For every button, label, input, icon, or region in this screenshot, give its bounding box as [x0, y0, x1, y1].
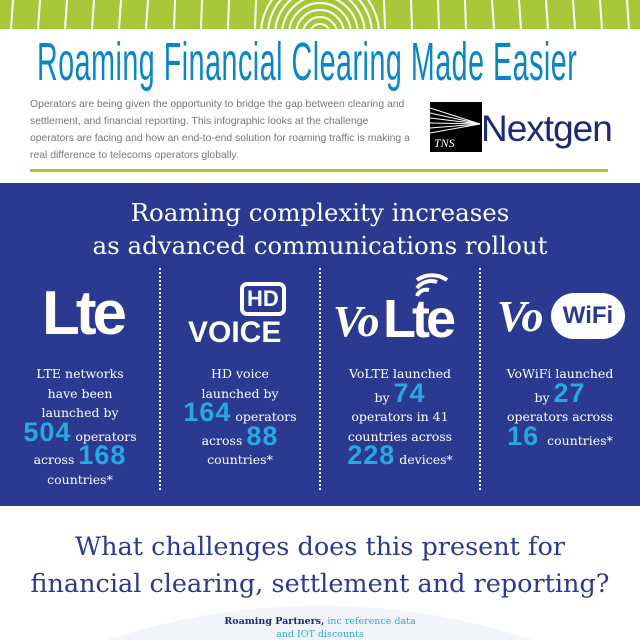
- stat: HD voice: launched by: [201, 386, 279, 400]
- light circle: [0, 600, 640, 640]
- logo: TNS Nextgen: Nextgen: [481, 108, 612, 149]
- stat: VoLTE: 228 devices*: [347, 440, 453, 470]
- icon: VoWiFi: [497, 292, 625, 341]
- stat: VoWiFi: VoWiFi launched: [507, 366, 613, 381]
- stat: LTE: across 168: [34, 440, 126, 470]
- title: Roaming Financial Clearing Made Easier: [37, 32, 577, 92]
- divider green: [30, 169, 608, 172]
- icon: VoLTE: Vo: [333, 297, 379, 346]
- stat: LTE: LTE networks: [36, 366, 124, 381]
- text: roaming partners: [224, 616, 416, 640]
- panel heading: as advanced communications rollout: [93, 231, 547, 260]
- icon: HD voice: HD: [247, 286, 279, 311]
- stat: LTE: have been: [48, 386, 112, 400]
- stat: HD voice: countries*: [207, 452, 273, 467]
- icon: VoWiFi: Vo: [497, 292, 543, 341]
- stat: VoLTE: operators in 41: [351, 409, 449, 424]
- text: roaming partners: Roaming Partners, inc reference data: [224, 616, 416, 627]
- intro text: Operators are being given the opportunity to bridge the gap between clearing and settlement, and financial reporting. This infographic looks at the challenge operators are facing and how an end-to-end solution for roaming traffic is making a real difference to telecoms operators globally.: [30, 99, 410, 161]
- stat: HD voice: across 88: [202, 420, 278, 450]
- stat: VoLTE: countries across: [348, 428, 452, 444]
- panel heading: [93, 198, 548, 260]
- icon: HD voice: [188, 282, 286, 349]
- stat: VoLTE: [347, 366, 453, 470]
- icon: HD voice: VOICE: [188, 316, 281, 349]
- stat: LTE: 504 operators: [23, 416, 137, 446]
- logo: TNS Nextgen: [430, 102, 612, 152]
- stat: VoLTE: VoLTE launched: [349, 366, 451, 381]
- stat: LTE: launched by: [41, 405, 119, 420]
- stat: VoWiFi: operators across: [507, 409, 613, 424]
- stat: VoWiFi: by 27: [534, 378, 586, 408]
- header band: [0, 0, 640, 29]
- stat: VoLTE: by 74: [374, 378, 426, 408]
- icon: VoWiFi: WiFi: [563, 302, 613, 329]
- panel: blue stats: [0, 183, 640, 506]
- panel heading: Roaming complexity increases: [131, 198, 509, 227]
- challenges heading: What challenges does this present for: [75, 532, 565, 562]
- icon: VoLTE: Lte: [383, 289, 452, 349]
- logo: TNS Nextgen: TNS: [434, 136, 455, 150]
- stat: HD voice: [183, 366, 297, 467]
- challenges heading: [30, 532, 609, 599]
- text: roaming partners: and IOT discounts: [276, 629, 364, 640]
- icon: LTE: Lte: [42, 279, 123, 348]
- stat: HD voice: 164 operators: [183, 397, 297, 427]
- challenges heading: financial clearing, settlement and reporting?: [30, 569, 609, 599]
- stat: LTE: countries*: [47, 472, 113, 486]
- stat: HD voice: HD voice: [211, 366, 269, 381]
- stat: VoWiFi: [506, 366, 613, 450]
- icon: VoLTE: [333, 273, 454, 349]
- stat: LTE: [23, 366, 137, 486]
- stat: VoWiFi: 16 countries*: [507, 420, 613, 450]
